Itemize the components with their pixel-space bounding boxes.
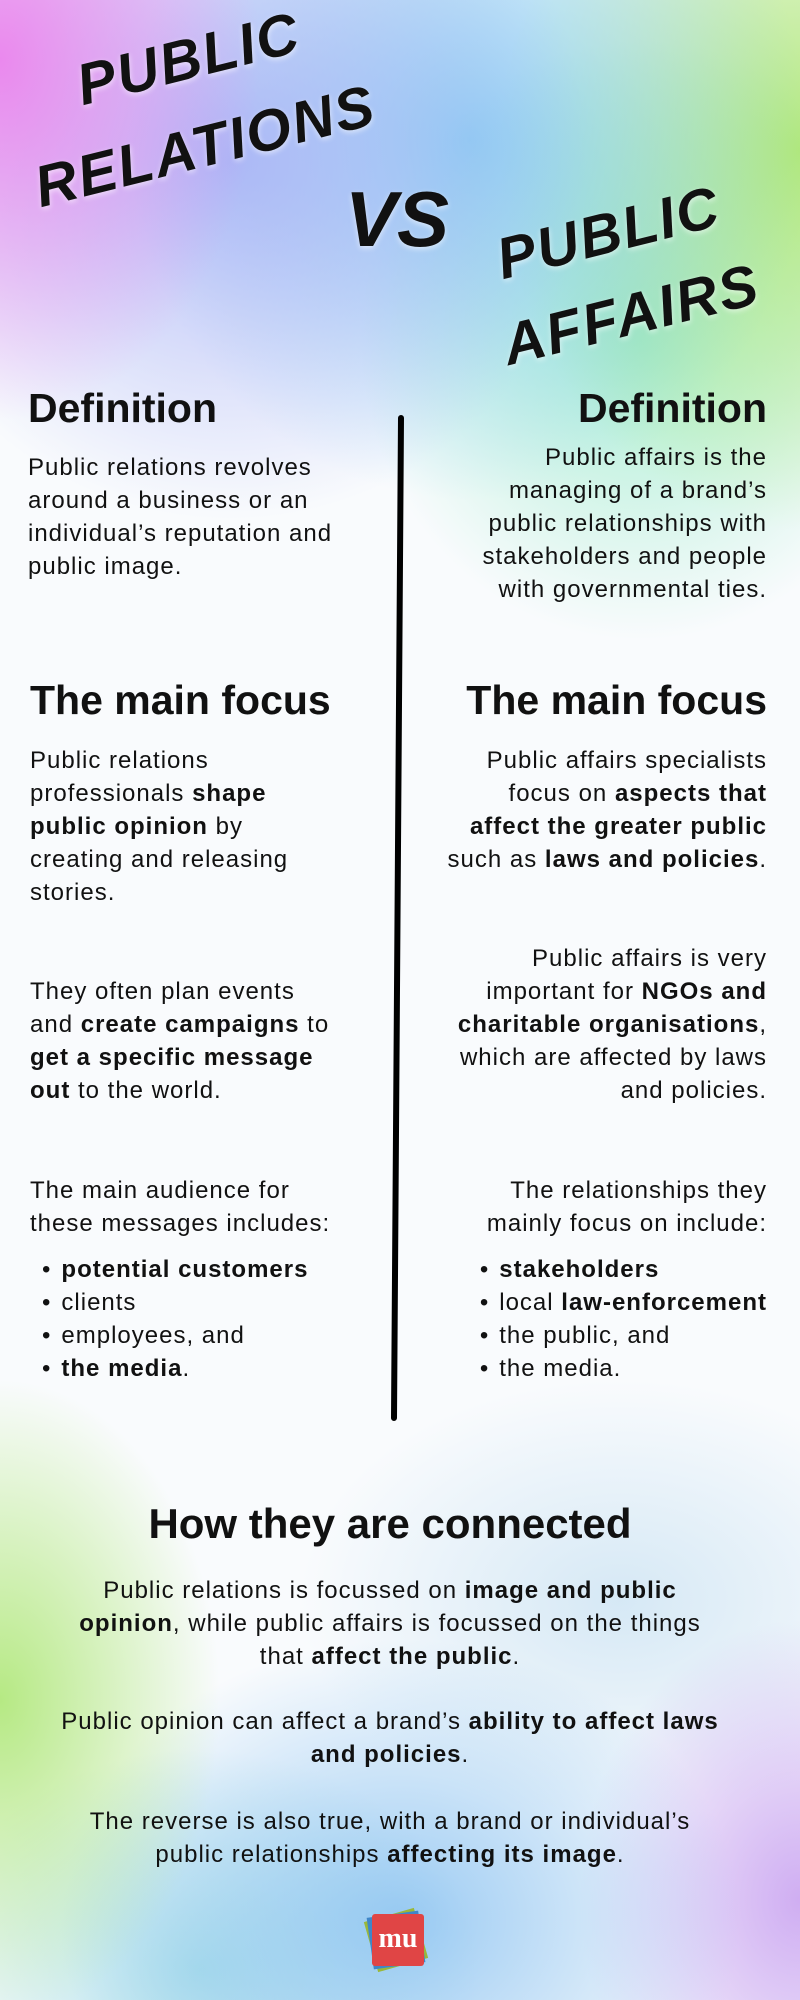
title: RELATIONS [28, 73, 382, 220]
text: PR focus 1: stories. [30, 879, 115, 906]
text: PA focus 2 [458, 945, 767, 1104]
text: PA definition: stakeholders and people [482, 543, 767, 570]
text: PA relationships [480, 1177, 767, 1382]
heading: main focus left: The main focus [30, 677, 331, 723]
text: PA definition: with governmental ties. [499, 576, 767, 603]
text: PR focus 2: and create campaigns to [30, 1011, 329, 1038]
text: PR definition: Public relations revolves [28, 454, 312, 481]
text: PR focus 2: out to the world. [30, 1077, 222, 1104]
text: connection 2: and policies. [311, 1741, 469, 1768]
title [28, 0, 766, 378]
text: PA focus 2: which are affected by laws [460, 1044, 767, 1071]
text: PR audience: these messages includes: [30, 1210, 330, 1237]
text: PR audience: The main audience for [30, 1177, 290, 1204]
text: PA focus 2: charitable organisations, [458, 1011, 767, 1038]
text: PR definition [28, 454, 332, 580]
text: PR definition: around a business or an [28, 487, 309, 514]
text: PR focus 2 [30, 978, 329, 1104]
text: PR focus 1 [30, 747, 288, 906]
text: PA relationships: The relationships they [510, 1177, 767, 1204]
text: connection 1 [79, 1577, 701, 1670]
text: PA focus 2: and policies. [621, 1077, 767, 1104]
text: PA focus 1 [448, 747, 767, 873]
heading: definition left: Definition [28, 385, 217, 431]
text: PR definition: individual’s reputation and [28, 520, 332, 547]
text: PA focus 1: such as laws and policies. [448, 846, 767, 873]
text: PA definition [482, 444, 767, 603]
text: PA relationships: mainly focus on include: [487, 1210, 767, 1237]
divider line [391, 415, 404, 1421]
text: PA focus 2: important for NGOs and [486, 978, 767, 1005]
text: connection 3 [90, 1808, 690, 1868]
text: PA definition: public relationships with [489, 510, 767, 537]
text: connection 1: Public relations is focussed on image and public [103, 1577, 677, 1604]
text: PA focus 1: affect the greater public [470, 813, 767, 840]
text: PA relationships: stakeholders [499, 1256, 659, 1283]
text: PA focus 1: Public affairs specialists [487, 747, 767, 774]
text: connection 1: that affect the public. [260, 1643, 520, 1670]
heading: definition right: Definition [578, 385, 767, 431]
text: connection 2 [61, 1708, 719, 1768]
text: PR audience: clients [61, 1289, 136, 1316]
heading: main focus right: The main focus [466, 677, 767, 723]
text: PA relationships: local law-enforcement [499, 1289, 767, 1316]
logo: mu [364, 1908, 428, 1972]
heading: how they are connected: How they are connected [148, 1500, 632, 1547]
text: PA relationships: the public, and [499, 1322, 670, 1349]
text: PR definition: public image. [28, 553, 182, 580]
text: PA definition: managing of a brand’s [509, 477, 767, 504]
title: public relations: PUBLIC [70, 0, 307, 118]
text: PR audience [30, 1177, 330, 1382]
title: AFFAIRS [496, 252, 766, 378]
text: PR audience: the media. [61, 1355, 190, 1382]
text: PR focus 2: get a specific message [30, 1044, 313, 1071]
text: PA relationships: the media. [499, 1355, 621, 1382]
text: PA definition: Public affairs is the [545, 444, 767, 471]
text: connection 1: opinion, while public affairs is focussed on the things [79, 1610, 701, 1637]
title: public affairs: PUBLIC [490, 174, 727, 292]
text: PA focus 1: focus on aspects that [509, 780, 767, 807]
text: PR focus 1: professionals shape [30, 780, 266, 807]
text: connection 2: Public opinion can affect a brand’s ability to affect laws [61, 1708, 719, 1735]
text: PR audience: employees, and [61, 1322, 245, 1349]
text: PR focus 1: Public relations [30, 747, 209, 774]
text: PR focus 2: They often plan events [30, 978, 295, 1005]
text: connection 3: public relationships affecting its image. [155, 1841, 625, 1868]
title: vs: VS [345, 175, 449, 263]
text: connection 3: The reverse is also true, with a brand or individual’s [90, 1808, 690, 1835]
text: PR focus 1: public opinion by [30, 813, 243, 840]
logo: mu: mu [379, 1923, 417, 1954]
text: PR focus 1: creating and releasing [30, 846, 288, 873]
text: PR audience: potential customers [61, 1256, 308, 1283]
text: PA focus 2: Public affairs is very [532, 945, 767, 972]
